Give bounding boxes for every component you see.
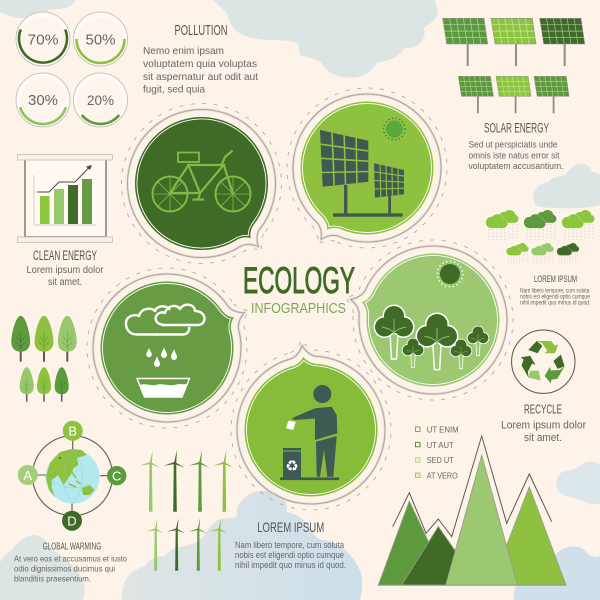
- solar energy heading: SOLAR ENERGY: [484, 120, 549, 136]
- pollution heading: POLLUTION: [174, 22, 228, 39]
- global warming text: At vero eos et accusamus et iusto: [14, 554, 127, 564]
- leaf trees: [11, 316, 77, 402]
- panel: recycling bubble: [222, 331, 399, 518]
- icon: rain drops: [146, 347, 177, 367]
- lorem ipsum text: nobis est eligendi optio cumque: [235, 550, 344, 560]
- lorem ipsum small heading: LOREM IPSUM: [534, 274, 577, 285]
- recycle text: Lorem ipsum dolor: [501, 420, 586, 432]
- global warming text: [14, 554, 127, 584]
- title: INFOGRAPHICS: [251, 300, 346, 317]
- panel: solar bubble: [250, 57, 478, 288]
- pollution text: sit aspernatur aut odit aut: [143, 72, 258, 83]
- recycle text: sit amet.: [524, 432, 562, 444]
- panel row 2: [458, 76, 569, 113]
- gauge 20%: 20%: [87, 92, 114, 108]
- solar energy text: voluptatem accusantium.: [468, 161, 564, 171]
- title: ECOLOGY: [243, 260, 355, 301]
- turbine row 1: [139, 450, 234, 512]
- percentage gauges: [16, 12, 128, 127]
- pollution text: Nemo enim ipsam: [143, 46, 224, 57]
- lorem ipsum heading: LOREM IPSUM: [257, 519, 324, 535]
- pollution text: [143, 46, 258, 96]
- clean energy text: sit amet.: [48, 277, 82, 288]
- global warming heading: GLOBAL WARMING: [43, 540, 101, 552]
- lorem ipsum small text: [520, 288, 591, 306]
- turbine row 2: [146, 518, 227, 571]
- pollution text: fugit, sed quia: [143, 84, 205, 96]
- icon: recycle symbol: [512, 330, 575, 393]
- global warming text: blanditiis praesentium.: [14, 574, 91, 584]
- legend: [416, 424, 459, 480]
- solar energy text: omnis iste natus error sit: [468, 150, 560, 160]
- legend: UT ENIM: [427, 424, 459, 434]
- recycle text: [501, 420, 586, 444]
- recycle heading: RECYCLE: [524, 402, 562, 416]
- solar energy text: Sed ut perspiciatis unde: [468, 140, 558, 150]
- node D: D: [67, 514, 77, 528]
- pollution text: voluptatem quia voluptas: [143, 59, 257, 70]
- clean energy text: [26, 265, 104, 288]
- rain clouds set: [486, 210, 594, 263]
- panel row 1: [443, 18, 585, 66]
- panel: bicycle bubble: [89, 71, 322, 305]
- icon: dark sun: [437, 261, 463, 287]
- clean energy heading: CLEAN ENERGY: [33, 248, 97, 263]
- global warming text: odio dignissimos ducimus qui: [14, 564, 115, 574]
- panel: forest bubble: [325, 220, 530, 417]
- solar panels: [443, 18, 585, 113]
- global warming diagram: [18, 421, 126, 531]
- clean energy text: Lorem ipsum dolor: [26, 265, 104, 276]
- wind turbines: [139, 450, 234, 571]
- node B: B: [68, 424, 77, 438]
- icon: sun: [384, 118, 405, 140]
- panel: rain bubble: [61, 237, 283, 454]
- icon: globe: [46, 449, 100, 504]
- icon: recycling bin: ♻: [285, 457, 299, 475]
- icon: bicycle: [152, 150, 251, 212]
- icon: person throwing litter: [286, 385, 337, 477]
- legend: UT AUT: [427, 440, 454, 450]
- lorem ipsum text: Nam libero tempore, cum soluta: [235, 540, 344, 550]
- solar energy text: [468, 140, 564, 171]
- icon: trees: [375, 306, 488, 370]
- gauge 70%: 70%: [28, 32, 59, 48]
- gauge 50%: 50%: [86, 32, 116, 48]
- icon: recycling bin: [280, 448, 339, 480]
- gauge 30%: 30%: [28, 93, 58, 109]
- clean energy chart: [18, 154, 112, 242]
- icon: water basin: [137, 378, 190, 397]
- node A: A: [23, 468, 32, 483]
- node C: C: [112, 468, 121, 484]
- legend: AT VERO: [427, 470, 458, 480]
- legend: SED UT: [427, 455, 454, 465]
- icon: solar panels: [320, 130, 404, 217]
- mountains chart: [378, 436, 566, 585]
- lorem ipsum text: nihil impedit quo minus id quod.: [235, 560, 346, 570]
- icon: rain clouds: [126, 305, 205, 334]
- title: [243, 260, 355, 317]
- lorem ipsum text: [235, 540, 346, 570]
